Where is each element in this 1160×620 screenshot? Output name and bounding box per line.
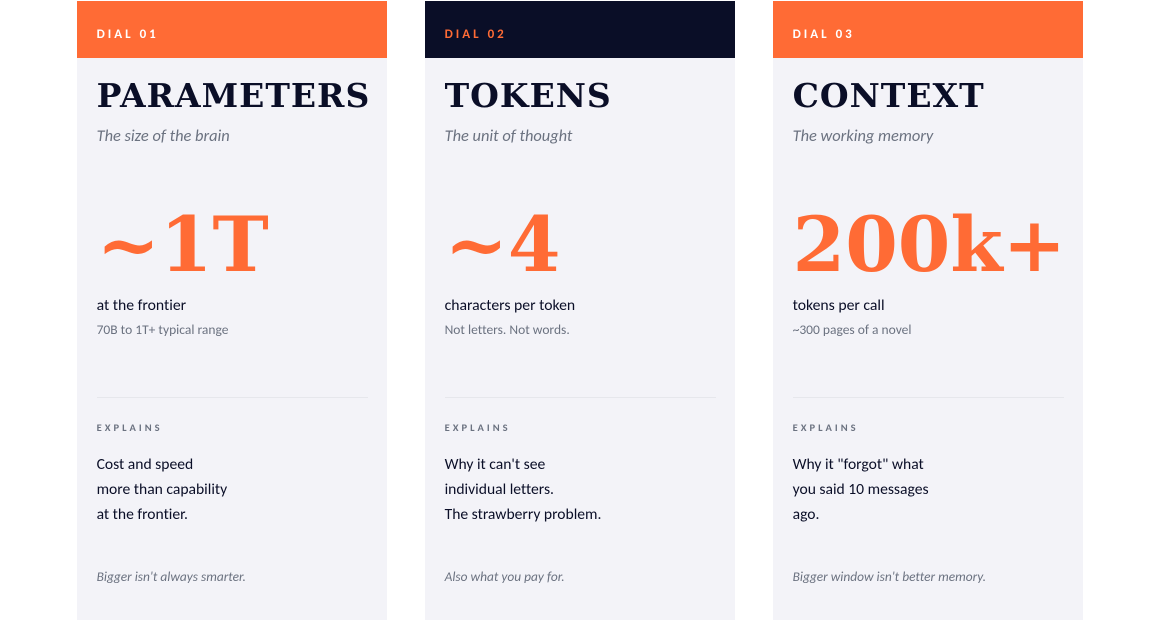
heading: context: CONTEXT xyxy=(793,76,985,115)
number caption: characters per token xyxy=(445,296,575,315)
subtitle: The unit of thought xyxy=(445,126,572,146)
subtitle: The size of the brain xyxy=(97,126,230,146)
explanation text: Cost and speed xyxy=(97,455,193,474)
number note: ~300 pages of a novel xyxy=(793,321,912,338)
explains label: EXPLAINS xyxy=(445,421,511,434)
header band: dial 01: DIAL 01 xyxy=(97,27,159,42)
footer note: Bigger window isn't better memory. xyxy=(793,568,986,584)
explanation text: at the frontier. xyxy=(97,505,188,524)
explanation text: The strawberry problem. xyxy=(445,505,601,524)
explains label: EXPLAINS xyxy=(97,421,163,434)
panel: parameters xyxy=(77,1,387,620)
big number: ~1T: ~1T xyxy=(97,200,269,289)
explanation text: Why it "forgot" what xyxy=(793,455,924,474)
explanation text: ago. xyxy=(793,505,819,524)
panel: context xyxy=(773,1,1083,620)
header band: dial 02: DIAL 02 xyxy=(445,27,507,42)
footer note: Also what you pay for. xyxy=(445,568,565,584)
number note: 70B to 1T+ typical range xyxy=(97,321,228,338)
explanation text: you said 10 messages xyxy=(793,480,929,499)
header band: dial 02 xyxy=(425,1,735,58)
explanation text: individual letters. xyxy=(445,480,554,499)
explanation text xyxy=(444,455,601,524)
heading: parameters: PARAMETERS xyxy=(97,76,370,115)
number caption: at the frontier xyxy=(97,296,186,315)
panel: tokens xyxy=(425,1,735,620)
explanation text xyxy=(97,455,227,524)
heading: tokens: TOKENS xyxy=(445,76,612,115)
explains label: EXPLAINS xyxy=(793,421,859,434)
explanation text: more than capability xyxy=(97,480,227,499)
explanation text xyxy=(792,455,929,524)
number note: Not letters. Not words. xyxy=(445,321,570,338)
number caption: tokens per call xyxy=(793,296,885,315)
header band: dial 03: DIAL 03 xyxy=(793,27,855,42)
subtitle: The working memory xyxy=(793,126,933,146)
header band: dial 01 xyxy=(77,1,387,58)
header band: dial 03 xyxy=(773,1,1083,58)
big number: 200k+: 200k+ xyxy=(793,200,1066,289)
footer note: Bigger isn't always smarter. xyxy=(97,568,246,584)
explanation text: Why it can't see xyxy=(445,455,545,474)
big number: ~4: ~4 xyxy=(445,200,561,289)
